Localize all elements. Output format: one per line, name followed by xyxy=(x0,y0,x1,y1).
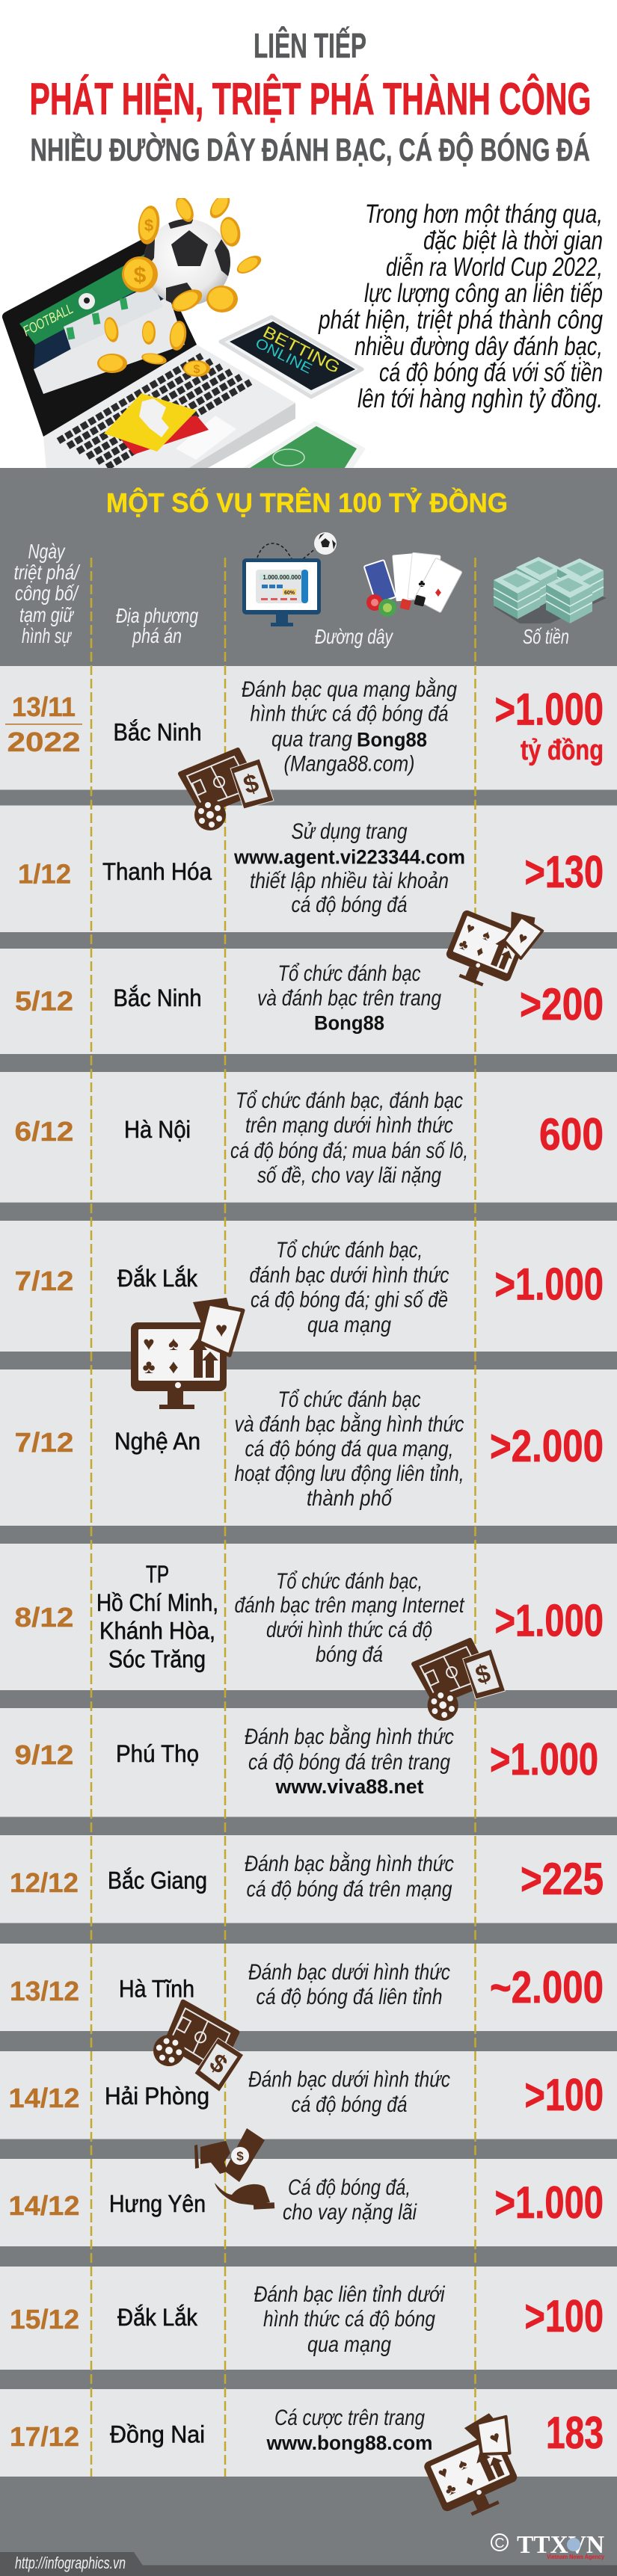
locality: Hải Phòng xyxy=(105,2083,209,2110)
icon: football tablet and phone, row 1 xyxy=(180,750,274,831)
ring description: cá độ bóng đá; ghi số đề xyxy=(251,1288,448,1313)
amount: 600 xyxy=(539,1109,604,1159)
ring description: Tổ chức đánh bạc, xyxy=(276,1569,423,1594)
icon: football tablet and phone, row 7 xyxy=(414,1640,506,1721)
ring description: qua mạng xyxy=(307,2332,391,2357)
locality: Khánh Hòa, xyxy=(99,1618,215,1645)
column header: date: tạm giữ xyxy=(19,603,75,626)
column header: date: triệt phá/ xyxy=(13,561,81,584)
logo: TTXVN: C xyxy=(495,2536,504,2551)
column dividers xyxy=(91,558,476,2477)
date: 5/12 xyxy=(15,985,73,1017)
locality: Hà Tĩnh xyxy=(119,1976,194,2003)
ring description: số đề, cho vay lãi nặng xyxy=(257,1163,441,1188)
row: 1/12 Thanh Hóa xyxy=(18,819,604,917)
ring description: Sử dụng trang xyxy=(292,819,408,844)
ring description xyxy=(235,1387,464,1511)
whistle xyxy=(139,398,169,437)
column header: date: công bố/ xyxy=(15,582,80,605)
illustration: laptop, football, coins and betting devices: ONLINE xyxy=(253,336,314,378)
laptop screen xyxy=(2,239,197,437)
column header: amount: Số tiền xyxy=(523,625,569,648)
gold coins: $ xyxy=(194,363,200,376)
icon: gambling monitor and card, row 5 xyxy=(131,1298,243,1409)
ring description: cá độ bóng đá trên trang xyxy=(248,1750,450,1775)
title xyxy=(30,26,591,168)
section heading: MỘT SỐ VỤ TRÊN 100 TỶ ĐỒNG xyxy=(106,487,508,518)
football xyxy=(144,219,230,306)
locality: Hồ Chí Minh, xyxy=(96,1589,218,1616)
ring description xyxy=(250,1238,449,1337)
ring description: Đánh bạc bằng hình thức xyxy=(245,1852,454,1876)
column header: locality: Địa phương xyxy=(116,604,198,627)
row: 12/12 Bắc Giang xyxy=(10,1852,604,1904)
icon: playing cards, chips and dice xyxy=(364,552,462,617)
locality: Bắc Giang xyxy=(108,1867,207,1894)
ring description: và đánh bạc bằng hình thức xyxy=(235,1412,464,1437)
row: 17/12 Đồng Nai xyxy=(10,2406,604,2458)
ring description: thiết lập nhiều tài khoản xyxy=(250,869,449,893)
footer strip xyxy=(0,2566,617,2576)
ring description: đánh bạc trên mạng Internet xyxy=(235,1593,465,1618)
ring description xyxy=(248,1960,450,2009)
ring description: cá độ bóng đá xyxy=(292,893,407,917)
row: 6/12 Hà Nội xyxy=(15,1088,604,1188)
illustration: laptop, football, coins and betting devices xyxy=(2,191,366,478)
date xyxy=(5,691,82,757)
ring description: Đánh bạc dưới hình thức xyxy=(248,1960,450,1985)
row: 5/12 Bắc Ninh xyxy=(15,961,604,1035)
locality: Hưng Yên xyxy=(109,2190,206,2217)
ring description xyxy=(245,1852,454,1902)
table header xyxy=(13,532,607,648)
locality: Bắc Ninh xyxy=(114,719,202,746)
ring description xyxy=(230,1088,468,1188)
date: 17/12 xyxy=(10,2421,79,2452)
ring description xyxy=(266,2406,432,2454)
ring description: thành phố xyxy=(307,1486,393,1511)
icon: betting monitor with ball: 1.000.000.000 xyxy=(263,574,301,581)
date: 15/12 xyxy=(10,2304,79,2335)
icon: betting monitor with ball: 60% xyxy=(284,591,295,596)
trackpad xyxy=(176,416,236,460)
ring description: Đánh bạc liên tỉnh dưới xyxy=(254,2282,446,2307)
icon: football tablet and phone, rows 10 to 11 xyxy=(138,1987,260,2110)
icon: gambling monitor and card, row 2 xyxy=(440,892,546,999)
ring description xyxy=(235,1569,465,1667)
illustration: laptop, football, coins and betting devices: FOOTBALL xyxy=(21,301,76,339)
icon: betting monitor with ball xyxy=(242,532,337,626)
column header: date xyxy=(13,540,81,647)
amount xyxy=(495,685,604,766)
ring description: Bong88 xyxy=(314,1012,384,1035)
locality: Hà Nội xyxy=(124,1116,191,1143)
row: 7/12 Nghệ An xyxy=(15,1387,604,1511)
ring description: trên mạng dưới hình thức xyxy=(245,1113,453,1138)
locality: Nghệ An xyxy=(114,1428,200,1455)
locality: Phú Thọ xyxy=(116,1740,199,1767)
ring description: www.agent.vi223344.com xyxy=(233,846,465,869)
locality: Đồng Nai xyxy=(110,2421,205,2447)
row: 8/12 multiple localities xyxy=(15,1561,604,1673)
ring description: www.viva88.net xyxy=(275,1775,424,1798)
row: 13/11/2022 Bắc Ninh xyxy=(5,677,604,776)
date: 12/12 xyxy=(10,1867,79,1898)
gold coins xyxy=(97,191,264,377)
ring description: hình thức cá độ bóng xyxy=(263,2307,435,2332)
ring description: cá độ bóng đá xyxy=(292,2092,407,2117)
ring description: www.bong88.com xyxy=(266,2432,432,2454)
date: 13/11 xyxy=(12,691,76,722)
ring description: qua trang xyxy=(271,727,352,752)
ring description: Bong88 xyxy=(357,728,427,751)
ring description xyxy=(254,2282,446,2357)
logo: TTXVN: TTXVN xyxy=(517,2531,604,2559)
locality: Đắk Lắk xyxy=(117,2304,198,2331)
date: 7/12 xyxy=(15,1427,73,1458)
ring description: Tổ chức đánh bạc xyxy=(278,1387,420,1412)
row: 14/12 Hưng Yên xyxy=(9,2175,604,2228)
date: 14/12 xyxy=(9,2190,79,2221)
ring description: Tổ chức đánh bạc, xyxy=(276,1238,423,1263)
logo: TTXVN: Vietnam News Agency xyxy=(547,2554,604,2560)
icon: playing cards, chips and dice: ♣ xyxy=(418,577,426,589)
ring description: (Manga88.com) xyxy=(284,752,414,776)
ring description: và đánh bạc trên trang xyxy=(257,986,441,1011)
phone with football pitch xyxy=(243,421,366,468)
ring description xyxy=(283,2175,417,2225)
keyboard xyxy=(58,356,251,467)
row: 14/12 Hải Phòng xyxy=(9,2068,604,2120)
table row backgrounds xyxy=(0,666,617,2477)
ring description: Cá cược trên trang xyxy=(274,2406,425,2430)
red and yellow referee cards xyxy=(121,416,209,455)
ring description: dưới hình thức cá độ xyxy=(266,1618,432,1642)
ring description xyxy=(233,819,465,917)
date: 2022 xyxy=(7,727,81,757)
date: 8/12 xyxy=(15,1602,73,1633)
icon: hand passing money: $ xyxy=(236,2149,244,2163)
footer tab: website address: http://infographics.vn xyxy=(15,2554,126,2572)
date: 1/12 xyxy=(18,858,71,890)
icon: playing cards, chips and dice: ♦ xyxy=(435,585,442,600)
illustration: laptop, football, coins and betting devices: BETTING xyxy=(260,322,343,377)
locality: Đắk Lắk xyxy=(117,1265,198,1292)
ring description xyxy=(248,2068,450,2117)
ring description: Cá độ bóng đá, xyxy=(288,2175,411,2200)
ring description: đánh bạc dưới hình thức xyxy=(250,1263,449,1288)
ring description: cho vay nặng lãi xyxy=(283,2200,417,2225)
gold coins: $ xyxy=(134,263,147,288)
ring description: qua mạng xyxy=(307,1313,391,1337)
ring description xyxy=(242,677,457,776)
ring description: hình thức cá độ bóng đá xyxy=(250,701,449,727)
row: 7/12 Đắk Lắk xyxy=(15,1238,604,1337)
locality: Thanh Hóa xyxy=(102,858,212,885)
gold coins: $ xyxy=(144,216,153,235)
ring description xyxy=(245,1725,454,1798)
column header: date: Ngày xyxy=(28,540,66,563)
row: 15/12 Đắk Lắk xyxy=(10,2282,604,2357)
column header: locality: phá án xyxy=(132,624,182,647)
ring description: Đánh bạc qua mạng bằng xyxy=(242,677,457,702)
date: 9/12 xyxy=(15,1740,73,1770)
column header: ring: Đường dây xyxy=(315,625,393,648)
icon: hand passing money xyxy=(194,2128,274,2210)
ring description: cá độ bóng đá trên mạng xyxy=(247,1877,452,1902)
icon: gambling monitor and card, row 14 xyxy=(414,2408,537,2526)
intro paragraph xyxy=(318,200,603,413)
ring description: bóng đá xyxy=(316,1642,383,1667)
column header: date: hình sự xyxy=(22,624,73,647)
column header: locality xyxy=(116,604,198,647)
date: 14/12 xyxy=(9,2083,79,2113)
ring description: Đánh bạc bằng hình thức xyxy=(245,1725,454,1749)
laptop base xyxy=(43,345,295,478)
ring description: Đánh bạc dưới hình thức xyxy=(248,2068,450,2092)
date: 6/12 xyxy=(15,1116,73,1147)
icon: stacks of money xyxy=(494,557,607,623)
ring description: cá độ bóng đá liên tỉnh xyxy=(256,1985,443,2009)
title line: LIÊN TIẾP: LIÊN TIẾP xyxy=(254,26,366,65)
ring description: cá độ bóng đá; mua bán số lô, xyxy=(230,1138,468,1163)
ring description: hoạt động lưu động liên tỉnh, xyxy=(235,1461,464,1486)
date: 7/12 xyxy=(15,1266,73,1296)
ring description: Tổ chức đánh bạc xyxy=(278,961,420,986)
date: 13/12 xyxy=(10,1976,79,2006)
locality: TP xyxy=(146,1561,169,1588)
locality: Bắc Ninh xyxy=(114,985,202,1011)
ring description: Tổ chức đánh bạc, đánh bạc xyxy=(236,1088,463,1113)
locality xyxy=(96,1561,218,1673)
locality: Sóc Trăng xyxy=(108,1646,206,1673)
tablet: betting online xyxy=(221,317,362,397)
row: 9/12 Phú Thọ xyxy=(15,1725,598,1798)
ring description xyxy=(257,961,441,1035)
row: 13/12 Hà Tĩnh xyxy=(10,1960,604,2012)
ring description: cá độ bóng đá qua mạng, xyxy=(245,1437,453,1461)
